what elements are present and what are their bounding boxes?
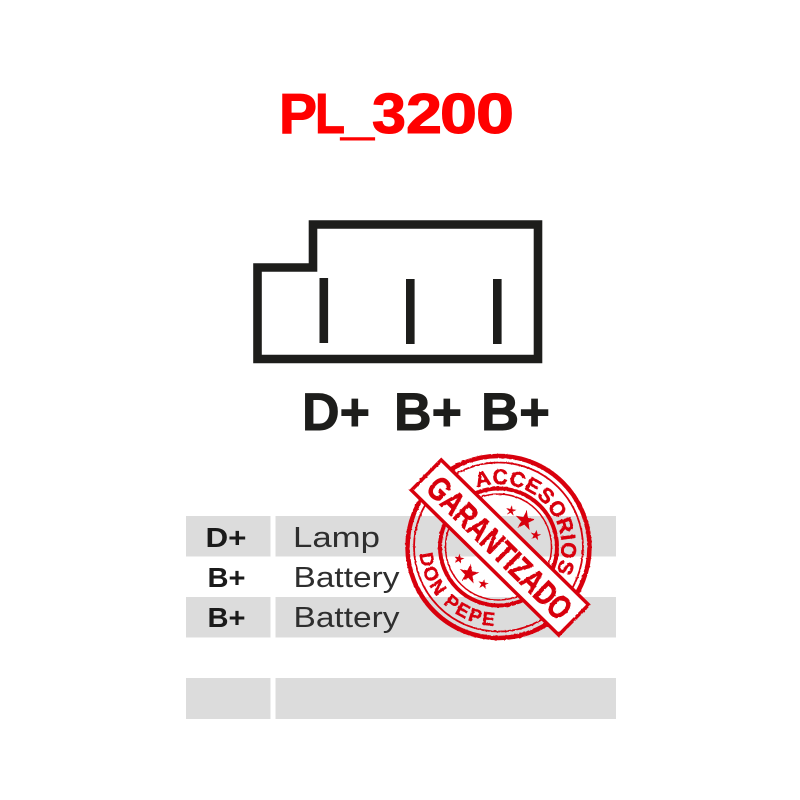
pin: first B+ — [406, 279, 415, 344]
title: 0 — [476, 82, 514, 146]
row 3: B+ Battery — [186, 597, 616, 638]
label: D+: D+ — [302, 383, 370, 442]
row 2: B+ Battery: B+ — [208, 562, 246, 593]
title: 3 — [372, 82, 406, 146]
stars — [453, 504, 542, 589]
title: P — [279, 82, 317, 146]
title: L — [315, 82, 345, 146]
label: first B+: B+ — [394, 383, 462, 442]
row 1: D+ Lamp — [186, 516, 616, 556]
row 2: B+ Battery — [208, 562, 400, 594]
connector diagram — [258, 224, 538, 359]
guarantee stamp — [404, 454, 592, 641]
pin: second B+ — [493, 279, 502, 344]
pin: D+ — [320, 278, 328, 343]
row 1: D+ Lamp: Lamp — [293, 522, 380, 554]
row 1: D+ Lamp: D+ — [206, 522, 246, 553]
terminal labels — [302, 383, 550, 442]
row 2: B+ Battery: Battery — [294, 562, 400, 594]
title — [279, 82, 514, 146]
title: 2 — [406, 82, 442, 146]
stamp rings — [408, 456, 590, 638]
title: 0 — [440, 82, 477, 146]
row 3: B+ Battery: Battery — [294, 602, 400, 634]
label: second B+: B+ — [481, 383, 550, 442]
curved text: ACCESORIOS: ACCESORIOS — [476, 468, 576, 575]
pin table — [186, 516, 616, 719]
row 5: empty — [186, 678, 616, 719]
title: _ — [340, 82, 375, 146]
curved text: DON PEPE: DON PEPE — [419, 552, 495, 626]
banner: GARANTIZADO — [409, 457, 591, 638]
row 3: B+ Battery: B+ — [208, 602, 246, 633]
banner: GARANTIZADO: GARANTIZADO — [420, 469, 580, 627]
connector outline — [258, 224, 538, 359]
